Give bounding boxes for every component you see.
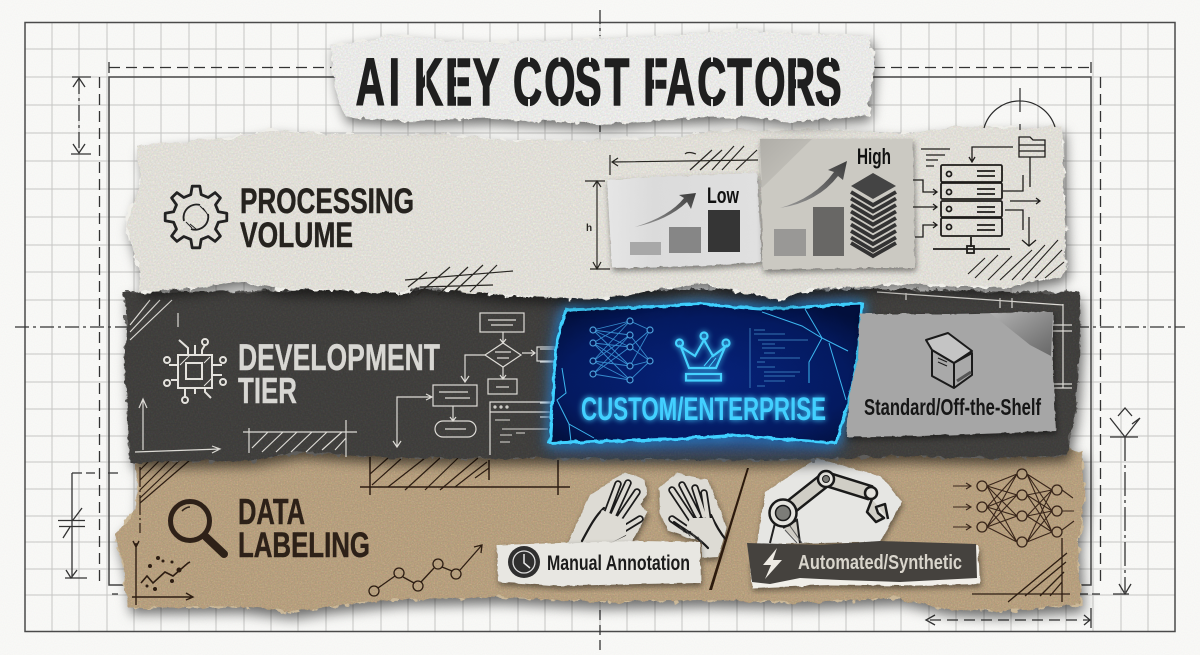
dark torn strip (125, 290, 1080, 462)
icon: lightning bolt (763, 548, 782, 579)
title text: AI KEY COST FACTORS (356, 44, 842, 120)
code lines (750, 328, 808, 388)
label: custom enterprise: CUSTOM/ENTERPRISE (581, 391, 826, 427)
panel: standard off-the-shelf (846, 312, 1056, 437)
heading: development: DEVELOPMENT (238, 337, 440, 378)
icon: neural network (590, 318, 653, 383)
icon: rising line chart sketch (369, 545, 482, 596)
card: high volume chart (760, 139, 915, 270)
light torn strip (126, 127, 1066, 300)
icon: neural network sketch (953, 469, 1074, 547)
icon: scatter chart sketch (132, 541, 193, 605)
hatch sketches on kraft (140, 457, 1070, 602)
label: manual annotation (497, 541, 701, 586)
panel: development tier dark paper (125, 290, 1080, 462)
panel: custom enterprise glowing card (548, 300, 862, 450)
icon: crown (676, 332, 730, 380)
label: manual annotation: Manual Annotation (547, 552, 690, 575)
white sketch marks on dark paper (130, 292, 1072, 457)
heading: volume: VOLUME (240, 216, 353, 255)
heading: data: DATA (238, 491, 305, 532)
icon: robot arm cutout (757, 458, 902, 544)
lightning cracks (557, 309, 848, 442)
heading: labeling: LABELING (238, 526, 370, 565)
dimension and hatch sketches (405, 146, 758, 295)
h dimension label: h (586, 223, 592, 234)
label: automated synthetic: Automated/Synthetic (798, 552, 962, 574)
panel: data labeling kraft paper (115, 448, 1084, 612)
icon: clock (508, 546, 540, 578)
corner hatch (968, 240, 1064, 280)
icon: microchip (164, 339, 226, 403)
panel: processing volume paper (126, 88, 1066, 300)
flowchart sketch (393, 313, 557, 455)
arc sketch (984, 88, 1055, 130)
icon: gear (165, 186, 227, 248)
icon: cardboard box (926, 333, 972, 388)
icon: server rack diagram (913, 137, 1045, 253)
title torn paper (331, 30, 873, 124)
label: automated synthetic (747, 541, 980, 588)
heading: tier: TIER (238, 370, 297, 411)
divider slash (709, 468, 749, 590)
title stencil bridges (425, 54, 831, 107)
card: low volume chart: Low (707, 183, 740, 208)
panel: standard off-the-shelf: Standard/Off-the-Shelf (864, 394, 1041, 420)
title (331, 30, 873, 124)
heading: processing: PROCESSING (240, 182, 414, 221)
card: high volume chart: High (857, 144, 891, 169)
icon: right hand cutout (659, 473, 727, 558)
card: low volume chart (607, 173, 762, 268)
icon: left hand cutout (566, 472, 648, 546)
kraft torn strip (115, 448, 1084, 612)
icon: magnifying glass (170, 502, 224, 554)
